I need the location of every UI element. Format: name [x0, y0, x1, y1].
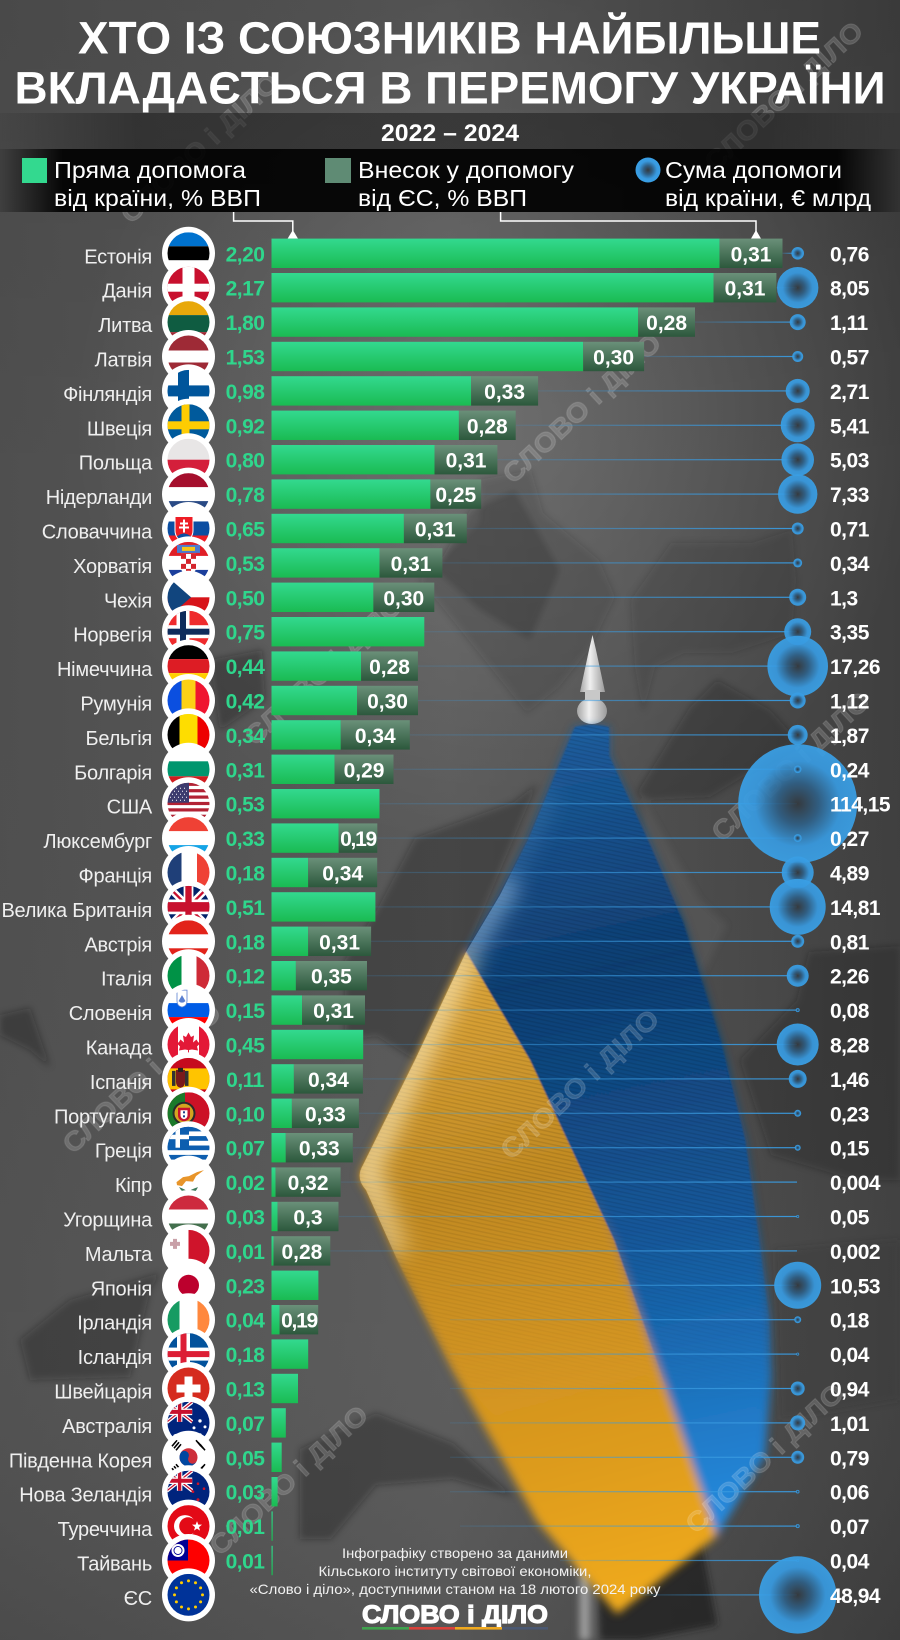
- direct aid values: 0,23: [226, 1275, 264, 1298]
- total aid values: 1,12: [830, 690, 869, 714]
- country labels: Ісландія: [78, 1347, 152, 1369]
- total aid values: 8,05: [830, 278, 870, 301]
- country labels: Нова Зеландія: [19, 1485, 152, 1507]
- flag: Turkey: [162, 1500, 215, 1544]
- flag: Czechia: [162, 570, 215, 614]
- bar: Germany: 0,28: [369, 656, 410, 679]
- source note: «Слово і діло», доступними станом на 18 лютого 2024 року: [250, 1581, 660, 1597]
- flag: Malta: [162, 1224, 215, 1268]
- country labels: Канада: [86, 1038, 153, 1060]
- country labels: Греція: [95, 1141, 152, 1163]
- bar: Ireland: 0,19: [281, 1310, 317, 1333]
- direct aid values: 0,07: [226, 1138, 264, 1161]
- direct aid values: 0,53: [226, 553, 264, 576]
- bar: Latvia: 0,30: [593, 346, 634, 370]
- bar: Malta: 0,28: [281, 1241, 323, 1264]
- total aid values: [830, 243, 891, 1608]
- total aid values: 1,46: [830, 1069, 869, 1092]
- legend: total aid: Сума допомоги: [665, 157, 842, 183]
- direct aid values: 0,18: [226, 1344, 265, 1367]
- flag: Italy: [162, 949, 215, 993]
- watermarks: СЛОВО і ДІЛО: [204, 1400, 374, 1561]
- total aid values: 48,94: [830, 1585, 881, 1608]
- country labels: Латвія: [95, 350, 152, 372]
- total aid values: 4,89: [830, 862, 869, 886]
- bar: UK: [272, 892, 375, 922]
- country labels: Чехія: [104, 590, 152, 612]
- bar: Croatia: [272, 548, 442, 578]
- bar: Greece: [272, 1133, 353, 1162]
- watermarks: СЛОВО і ДІЛО: [497, 328, 667, 489]
- total aid bubbles: [738, 247, 857, 1634]
- bar: Latvia: [272, 342, 644, 371]
- country labels: Франція: [79, 866, 152, 888]
- bar: South Korea: [272, 1443, 282, 1472]
- direct aid values: 0,78: [226, 484, 265, 507]
- bar: Canada: [272, 1030, 363, 1059]
- bar: Czechia: [272, 583, 434, 612]
- bar: Netherlands: [272, 479, 481, 509]
- legend: total aid: [636, 157, 872, 211]
- bar: Sweden: 0,28: [467, 415, 508, 438]
- direct aid values: 0,75: [226, 622, 265, 645]
- period band: [0, 113, 900, 149]
- watermarks: СЛОВО і ДІЛО: [115, 68, 285, 229]
- total aid values: 0,81: [830, 931, 870, 954]
- bar: Austria: 0,31: [319, 931, 360, 954]
- flag: Japan: [162, 1258, 215, 1302]
- bar: France: 0,34: [322, 862, 363, 886]
- direct aid values: 0,04: [226, 1310, 265, 1333]
- country labels: Румунія: [80, 694, 152, 716]
- country labels: Швейцарія: [54, 1382, 152, 1404]
- bar: Poland: 0,31: [446, 450, 487, 473]
- country labels: Угорщина: [63, 1210, 153, 1232]
- watermarks: СЛОВО і ДІЛО: [495, 1004, 665, 1165]
- bars: [272, 239, 782, 1575]
- direct aid values: 0,65: [226, 518, 265, 542]
- total aid values: 2,71: [830, 381, 870, 404]
- Ukrainian flag on staff: [340, 635, 790, 1640]
- bar: USA: [272, 789, 380, 818]
- flag: New Zealand: [162, 1465, 215, 1509]
- country labels: [1, 246, 153, 1610]
- direct aid values: 0,50: [226, 587, 264, 610]
- flag: Austria: [162, 914, 215, 958]
- legend: EU contribution: Внесок у допомогу: [358, 157, 575, 183]
- total aid values: 0,08: [830, 1000, 870, 1023]
- watermarks: СЛОВО і ДІЛО: [239, 590, 409, 751]
- country labels: Словаччина: [42, 522, 153, 544]
- country labels: Хорватія: [73, 556, 152, 578]
- total aid values: 14,81: [830, 897, 881, 920]
- flag: Lithuania: [162, 296, 215, 340]
- country labels: Австралія: [62, 1416, 152, 1438]
- bar: Iceland: [272, 1339, 308, 1369]
- bar: Belgium: 0,34: [355, 725, 396, 748]
- direct aid values: 0,98: [226, 381, 265, 404]
- bar: Croatia: 0,31: [391, 553, 432, 576]
- total aid values: 3,35: [830, 622, 870, 645]
- country labels: Польща: [79, 453, 153, 475]
- flag: Bulgaria: [162, 742, 215, 786]
- period band: 2022 – 2024: [381, 120, 520, 147]
- bar: Taiwan: [272, 1546, 273, 1575]
- flag: Hungary: [162, 1190, 215, 1234]
- bar: Ireland: [272, 1305, 318, 1334]
- title: ХТО ІЗ СОЮЗНИКІВ НАЙБІЛЬШЕ: [78, 12, 821, 64]
- bar: Denmark: 0,31: [725, 278, 766, 301]
- flag: Belgium: [162, 708, 215, 752]
- legend: total aid: від країни, € млрд: [665, 185, 872, 211]
- total aid values: 0,05: [830, 1206, 870, 1230]
- direct aid values: 0,31: [226, 759, 265, 782]
- country labels: Фінляндія: [63, 384, 152, 406]
- country labels: Нідерланди: [46, 487, 152, 509]
- direct aid values: 0,03: [226, 1206, 264, 1230]
- country labels: Тайвань: [77, 1554, 152, 1576]
- flag: Ireland: [162, 1293, 215, 1337]
- direct aid values: 0,33: [226, 828, 264, 851]
- direct aid values: 0,92: [226, 415, 264, 438]
- total aid values: 114,15: [830, 794, 891, 817]
- flag: Canada: [162, 1018, 215, 1062]
- total aid values: 1,3: [830, 587, 858, 610]
- country labels: Іспанія: [90, 1072, 152, 1094]
- direct aid values: 0,11: [226, 1069, 265, 1092]
- flag: Norway: [162, 605, 215, 649]
- direct aid values: 0,10: [226, 1103, 264, 1126]
- bar: Bulgaria: [272, 755, 394, 784]
- country labels: Швеція: [87, 418, 152, 440]
- country labels: Німеччина: [57, 659, 153, 681]
- bar: Norway: [272, 617, 424, 646]
- total aid values: 10,53: [830, 1275, 880, 1298]
- country labels: Південна Корея: [9, 1450, 152, 1472]
- total aid values: 0,57: [830, 346, 869, 370]
- bar: Switzerland: [272, 1374, 298, 1403]
- bar: Turkey: [272, 1511, 273, 1541]
- total aid values: 0,04: [830, 1550, 870, 1574]
- direct aid values: 0,01: [226, 1241, 265, 1264]
- total aid values: 5,41: [830, 415, 870, 438]
- bar: Finland: [272, 376, 538, 406]
- bar: Austria: [272, 927, 371, 956]
- title: ВКЛАДАЄТЬСЯ В ПЕРЕМОГУ УКРАЇНИ: [14, 62, 886, 114]
- bar: Portugal: 0,33: [305, 1103, 346, 1126]
- flag: USA: [162, 777, 215, 821]
- direct aid values: 0,51: [226, 897, 265, 920]
- bar: Luxembourg: 0,19: [340, 828, 376, 851]
- country labels: Норвегія: [73, 625, 152, 647]
- direct aid values: 0,05: [226, 1447, 265, 1470]
- flag: Sweden: [162, 398, 215, 442]
- country labels: Мальта: [85, 1244, 153, 1266]
- country labels: Велика Британія: [1, 900, 152, 922]
- country labels: Данія: [102, 281, 152, 303]
- flag: Netherlands: [162, 468, 215, 512]
- flag: Slovenia: [162, 984, 215, 1028]
- flag: Latvia: [162, 330, 215, 374]
- total aid values: 0,002: [830, 1241, 880, 1264]
- logo: СЛОВО і ДІЛО: [362, 1601, 548, 1629]
- total aid values: 17,26: [830, 656, 880, 679]
- legend: direct aid: Пряма допомога: [54, 157, 246, 183]
- direct aid values: 0,03: [226, 1482, 264, 1505]
- bar: Romania: 0,30: [367, 690, 408, 714]
- flags column: [162, 227, 215, 1621]
- flag: Germany: [162, 640, 215, 684]
- total aid values: 0,06: [830, 1482, 869, 1505]
- bar: Spain: 0,34: [308, 1069, 349, 1092]
- bar: Belgium: [272, 720, 410, 750]
- bar: Slovakia: [272, 514, 467, 543]
- flag: Luxembourg: [162, 814, 215, 856]
- country labels: Туреччина: [58, 1519, 153, 1541]
- direct aid values: 1,80: [226, 312, 264, 335]
- direct aid values: 0,01: [226, 1550, 265, 1574]
- bar: Hungary: [272, 1202, 338, 1231]
- bar: Poland: [272, 445, 497, 474]
- direct aid values: 0,02: [226, 1172, 264, 1195]
- total aid values: 0,76: [830, 243, 869, 266]
- direct aid values: 0,01: [226, 1516, 265, 1539]
- bar: Malta: [272, 1236, 330, 1266]
- country labels: Словенія: [69, 1003, 152, 1025]
- bar: Slovenia: [272, 995, 365, 1025]
- total aid values: 0,71: [830, 518, 870, 542]
- total aid values: 0,94: [830, 1378, 870, 1402]
- total aid values: 1,11: [830, 312, 869, 335]
- total aid values: 1,87: [830, 725, 869, 748]
- flag: Estonia: [162, 226, 215, 270]
- bar: Finland: 0,33: [484, 381, 525, 404]
- flag: Cyprus: [162, 1156, 215, 1200]
- flag: Iceland: [162, 1329, 215, 1372]
- total aid values: 2,26: [830, 966, 869, 989]
- direct aid values: 0,12: [226, 966, 264, 989]
- total aid values: 5,03: [830, 450, 869, 473]
- bar: Italy: [272, 961, 367, 990]
- flag: Romania: [162, 674, 215, 718]
- direct aid values: 0,18: [226, 862, 265, 886]
- flag: Spain: [162, 1052, 215, 1096]
- direct aid values: [226, 243, 265, 1573]
- total aid values: 0,04: [830, 1344, 870, 1367]
- flag: Denmark: [162, 266, 215, 305]
- bar: Lithuania: 0,28: [646, 312, 687, 335]
- direct aid values: 0,15: [226, 1000, 265, 1023]
- country labels: ЄС: [124, 1588, 152, 1610]
- direct aid values: 0,53: [226, 794, 264, 817]
- country labels: Бельгія: [86, 728, 152, 750]
- flag: Croatia: [162, 536, 215, 580]
- direct aid values: 0,44: [226, 656, 265, 679]
- legend: EU contribution: від ЄС, % ВВП: [358, 185, 527, 211]
- direct aid values: 0,07: [226, 1413, 264, 1436]
- direct aid values: 0,80: [226, 450, 264, 473]
- total aid values: 0,27: [830, 828, 869, 851]
- total aid values: 0,004: [830, 1172, 881, 1195]
- legend panel: [0, 149, 900, 212]
- watermarks: СЛОВО і ДІЛО: [706, 686, 876, 847]
- total aid values: 0,24: [830, 759, 870, 782]
- bar: Slovakia: 0,31: [415, 518, 456, 542]
- legend connector: total aid: [501, 212, 761, 239]
- country labels: Італія: [101, 969, 152, 991]
- country labels: Кіпр: [115, 1175, 152, 1197]
- bar: Spain: [272, 1064, 363, 1094]
- bar: Estonia: [272, 239, 782, 268]
- bar: Lithuania: [272, 307, 695, 337]
- direct aid values: 0,42: [226, 690, 264, 714]
- bar: Bulgaria: 0,29: [344, 759, 384, 782]
- bar: Sweden: [272, 411, 516, 440]
- flag: Portugal: [162, 1086, 215, 1130]
- flag: Switzerland: [162, 1362, 215, 1406]
- bar: New Zealand: [272, 1477, 278, 1506]
- direct aid values: 0,34: [226, 725, 265, 748]
- total aid values: 0,34: [830, 553, 870, 576]
- legend: EU contribution: [325, 157, 575, 211]
- bar: Hungary: 0,3: [293, 1206, 323, 1230]
- source note: [250, 1545, 660, 1597]
- flag: Slovakia: [162, 502, 215, 546]
- background banknotes: [0, 470, 900, 1640]
- country labels: Японія: [91, 1278, 152, 1300]
- legend connector: direct aid: [234, 212, 298, 239]
- flag: Finland: [162, 364, 215, 408]
- flag: EU: [162, 1568, 215, 1621]
- bar: Denmark: [272, 273, 776, 302]
- watermarks: СЛОВО і ДІЛО: [57, 998, 227, 1159]
- flag: Taiwan: [162, 1534, 215, 1587]
- direct aid values: 0,45: [226, 1034, 265, 1058]
- bar: Portugal: [272, 1099, 359, 1128]
- flag: France: [162, 846, 215, 890]
- direct aid values: 1,53: [226, 346, 264, 370]
- country labels: Естонія: [84, 246, 152, 268]
- country labels: Португалія: [54, 1106, 152, 1128]
- leader lines: [330, 253, 797, 1596]
- bar: Cyprus: [272, 1167, 341, 1197]
- bar: Australia: [272, 1408, 286, 1438]
- spire: [580, 635, 605, 692]
- country labels: Литва: [98, 315, 153, 337]
- bar: Czechia: 0,30: [383, 587, 424, 610]
- bar: France: [272, 858, 377, 887]
- bar: Estonia: 0,31: [731, 243, 772, 266]
- country labels: Австрія: [84, 934, 152, 956]
- country labels: США: [107, 797, 153, 819]
- flag: UK: [162, 881, 215, 924]
- bar: Germany: [272, 651, 418, 681]
- total aid values: 7,33: [830, 484, 869, 507]
- bar: Romania: [272, 686, 418, 715]
- watermarks: СЛОВО і ДІЛО: [699, 16, 869, 177]
- total aid values: 0,23: [830, 1103, 869, 1126]
- direct aid values: 2,20: [226, 243, 264, 266]
- total aid values: 0,18: [830, 1310, 870, 1333]
- total aid values: 0,07: [830, 1516, 869, 1539]
- flag: Poland: [162, 433, 215, 477]
- total aid values: 8,28: [830, 1034, 870, 1058]
- bar: Slovenia: 0,31: [313, 1000, 354, 1023]
- bar: Netherlands: 0,25: [435, 484, 477, 507]
- country labels: Ірландія: [77, 1313, 152, 1335]
- bar: Greece: 0,33: [299, 1138, 340, 1161]
- bar: Luxembourg: [272, 823, 377, 853]
- source note: Інфографіку створено за даними: [342, 1545, 568, 1561]
- legend: direct aid: від країни, % ВВП: [54, 185, 261, 211]
- legend: direct aid: [22, 157, 261, 211]
- country labels: Болгарія: [74, 762, 152, 784]
- flag: Greece: [162, 1121, 215, 1165]
- total aid values: 0,79: [830, 1447, 869, 1470]
- direct aid values: 0,13: [226, 1378, 264, 1402]
- direct aid values: 0,18: [226, 931, 265, 954]
- source note: Кільського інституту світової економіки,: [318, 1563, 592, 1579]
- total aid values: 1,01: [830, 1413, 870, 1436]
- title: [14, 12, 886, 114]
- bar: Cyprus: 0,32: [288, 1172, 329, 1195]
- direct aid values: 2,17: [226, 278, 264, 301]
- total aid values: 0,15: [830, 1138, 870, 1161]
- flag: Australia: [162, 1396, 215, 1440]
- flag: South Korea: [162, 1430, 215, 1474]
- bar: Italy: 0,35: [311, 966, 352, 989]
- bar: Japan: [272, 1271, 318, 1300]
- country labels: Люксембург: [44, 831, 152, 853]
- watermarks: СЛОВО і ДІЛО: [680, 1378, 850, 1539]
